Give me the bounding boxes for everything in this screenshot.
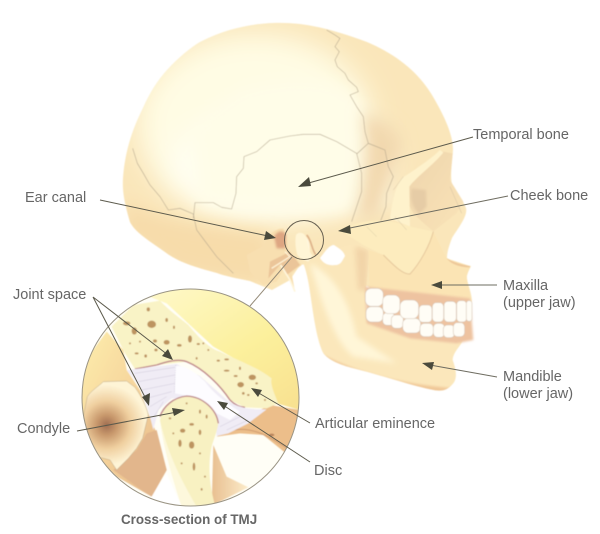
label: condyle: Condyle — [17, 421, 70, 437]
condyle bone — [212, 445, 248, 503]
upper right yellow band — [150, 290, 298, 410]
inset: cross-section of TMJ — [78, 287, 300, 510]
label: maxilla: (upper jaw) — [503, 295, 576, 311]
label: maxilla: Maxilla — [503, 278, 548, 294]
label: disc: Disc — [314, 463, 342, 479]
white gap below joint — [152, 476, 180, 504]
arrow: disc — [217, 401, 310, 462]
upper bone — [112, 301, 278, 408]
teeth — [365, 288, 472, 338]
gum shading — [365, 287, 473, 343]
mandible — [304, 238, 462, 392]
ear bones and styloid — [247, 228, 316, 292]
connector line to inset — [250, 257, 292, 306]
skull illustration — [123, 23, 473, 397]
label: ear canal: Ear canal — [25, 190, 86, 206]
joint space and disc — [127, 364, 267, 436]
label: joint space: Joint space — [13, 287, 86, 303]
left temporal bone — [82, 332, 156, 496]
lower tan — [114, 430, 166, 486]
bone pores — [123, 307, 266, 491]
arrow: temporal bone — [298, 137, 473, 187]
cranium — [123, 23, 472, 303]
mandibular notch — [320, 245, 345, 265]
label: mandible: Mandible — [503, 369, 562, 385]
label: temporal bone: Temporal bone — [473, 127, 569, 143]
arrows: joint space — [93, 297, 173, 406]
right tan — [216, 405, 298, 452]
arrow: condyle — [77, 408, 185, 431]
label: cheek bone: Cheek bone — [510, 188, 588, 204]
orbit and cheek — [340, 150, 471, 303]
caption: cross-section of TMJ: Cross-section of TMJ — [121, 512, 257, 527]
arrow: maxilla — [431, 281, 497, 289]
joint locator circle — [284, 220, 324, 260]
condyle ball — [83, 381, 148, 470]
label: mandible: (lower jaw) — [503, 386, 573, 402]
arrow: mandible — [422, 362, 497, 377]
arrow: articular eminence — [251, 388, 310, 423]
label: articular eminence: Articular eminence — [315, 416, 435, 432]
sutures — [133, 30, 393, 273]
arrow: cheek bone — [338, 196, 508, 234]
arrow: ear canal — [100, 200, 276, 240]
